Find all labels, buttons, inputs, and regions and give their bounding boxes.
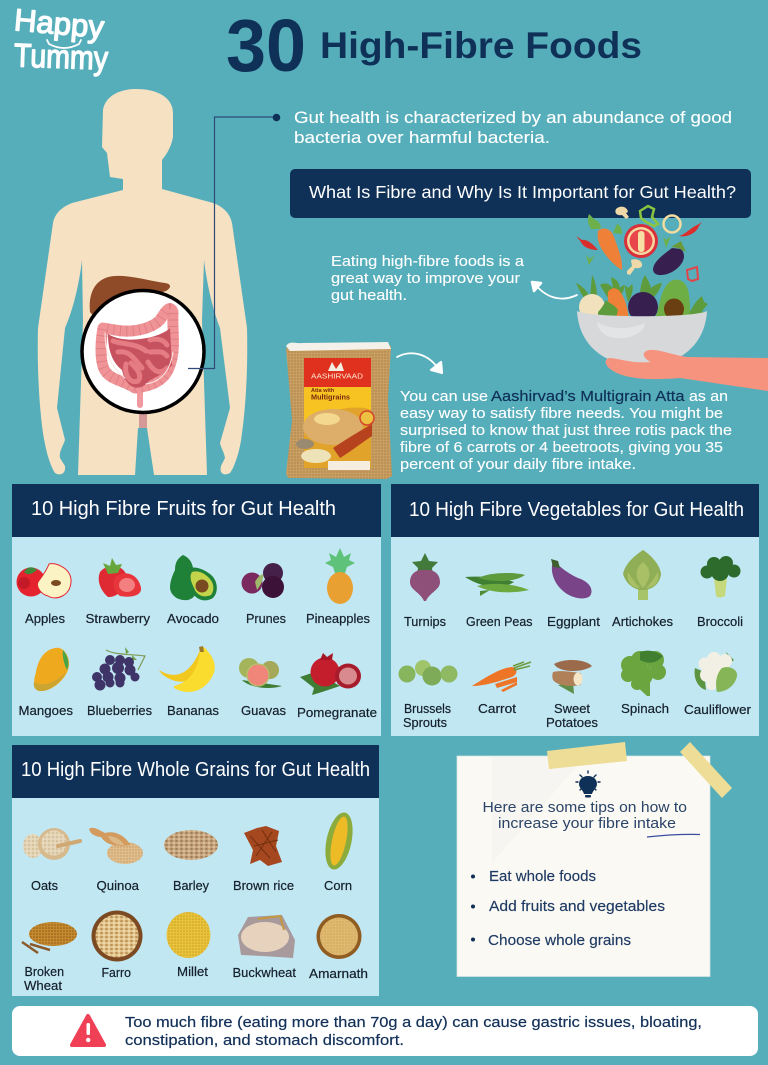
body outline bbox=[38, 89, 247, 475]
title: 30 bbox=[226, 4, 306, 87]
rice bowl bbox=[301, 449, 331, 463]
text: Aashirvad atta paragraph: Aashirvad’s Multigrain Atta bbox=[491, 388, 685, 405]
food: oats bbox=[23, 828, 80, 893]
panel heading bbox=[391, 484, 759, 537]
food: artichokes: Artichokes bbox=[612, 615, 673, 629]
tips note bbox=[457, 742, 732, 976]
text: eating high-fibre foods: gut health. bbox=[331, 287, 407, 304]
food: buckwheat: Buckwheat bbox=[232, 966, 297, 980]
bowl carrot bbox=[608, 288, 629, 318]
round seal bbox=[360, 411, 374, 425]
panel heading bbox=[12, 745, 379, 798]
illustration: bowl of vegetables bbox=[576, 206, 768, 391]
food: broken wheat bbox=[22, 922, 77, 993]
bag body bbox=[286, 346, 392, 479]
text: Aashirvad atta paragraph: surprised to know that just three rotis pack the bbox=[400, 422, 732, 439]
food: amarnath: Amarnath bbox=[309, 967, 368, 981]
food: millet: Millet bbox=[177, 965, 209, 979]
panel body bbox=[12, 537, 381, 736]
text: Aashirvad atta paragraph: fibre of 6 carrots or 4 beetroots, giving you 35 bbox=[400, 439, 723, 456]
food: green peas: Green Peas bbox=[466, 615, 532, 629]
food: bananas: Bananas bbox=[167, 704, 219, 718]
food: broccoli bbox=[697, 556, 743, 629]
food: pineapple bbox=[306, 548, 370, 626]
logo: Happy Tummy: Tummy bbox=[13, 36, 109, 77]
food: broken wheat: Broken bbox=[24, 965, 64, 979]
text: Aashirvad atta paragraph: easy way to satisfy fibre needs. You might be bbox=[400, 405, 723, 422]
liver bbox=[90, 276, 170, 330]
tip list: Choose whole grains bbox=[488, 933, 631, 949]
grain band bbox=[333, 424, 372, 458]
intro text: bacteria over harmful bacteria. bbox=[294, 129, 550, 147]
bag yellow panel bbox=[304, 387, 371, 468]
panel heading: 10 High Fibre Fruits for Gut Health bbox=[31, 498, 336, 520]
intestines bbox=[101, 309, 173, 405]
food: strawberry: Strawberry bbox=[86, 612, 151, 626]
flying carrot bbox=[598, 229, 622, 270]
subheading banner: What Is Fibre and Why Is It Important for Gut Health? bbox=[309, 182, 736, 202]
food: brussels sprouts: Sprouts bbox=[403, 716, 447, 730]
logo: Happy Tummy bbox=[13, 2, 109, 77]
food: spinach: Spinach bbox=[621, 702, 669, 716]
colon bbox=[101, 309, 173, 388]
warning text: constipation, and stomach discomfort. bbox=[125, 1032, 404, 1049]
food: quinoa: Quinoa bbox=[96, 879, 139, 893]
panel body bbox=[12, 798, 379, 996]
avocado bbox=[655, 280, 690, 318]
intro text bbox=[294, 109, 732, 147]
food: quinoa bbox=[89, 828, 143, 893]
mushrooms bbox=[615, 207, 642, 275]
food: sweet potatoes bbox=[546, 660, 598, 730]
food: turnips bbox=[404, 553, 446, 629]
food: pomegranate: Pomegranate bbox=[297, 706, 377, 720]
product name bbox=[311, 388, 350, 402]
tape left bbox=[547, 742, 627, 769]
warning text bbox=[125, 1014, 702, 1049]
food: carrot: Carrot bbox=[478, 702, 517, 716]
tip list: Eat whole foods bbox=[489, 869, 596, 885]
food: buckwheat bbox=[232, 915, 297, 980]
warning callout bbox=[12, 1006, 758, 1056]
chillies bbox=[576, 222, 702, 250]
product name: Multigrains bbox=[311, 394, 350, 402]
food: spinach bbox=[621, 651, 669, 716]
food: guavas bbox=[239, 658, 286, 718]
text: eating high-fibre foods: great way to improve your bbox=[331, 270, 520, 287]
text: Aashirvad atta paragraph: You can use bbox=[400, 388, 488, 405]
food: green peas bbox=[465, 573, 532, 629]
intestine loops bbox=[113, 339, 167, 382]
colon segments bbox=[101, 309, 173, 388]
food: broccoli: Broccoli bbox=[697, 615, 743, 629]
eggplant bbox=[653, 248, 684, 275]
bowl bbox=[577, 311, 707, 366]
panel heading: 10 High Fibre Vegetables for Gut Health bbox=[409, 499, 744, 521]
food: brussels sprouts: Brussels bbox=[404, 702, 451, 716]
bowl lettuce bbox=[598, 300, 618, 318]
food: prunes: Prunes bbox=[246, 612, 286, 626]
food: broken wheat: Wheat bbox=[24, 979, 63, 993]
warning text: Too much fibre (eating more than 70g a day) can cause gastric issues, bloating, bbox=[125, 1014, 702, 1031]
food: guavas: Guavas bbox=[241, 704, 286, 718]
food: eggplant bbox=[547, 559, 601, 629]
tip list: Add fruits and vegetables bbox=[489, 899, 665, 915]
food: cauliflower bbox=[684, 652, 751, 717]
food: eggplant: Eggplant bbox=[547, 615, 601, 629]
small intestine bbox=[108, 328, 172, 388]
product: Aashirvaad multigrain atta bag bbox=[286, 342, 392, 479]
panel heading bbox=[12, 484, 381, 537]
white line bbox=[105, 333, 173, 384]
food: millet bbox=[166, 912, 210, 979]
tip list bbox=[471, 869, 665, 949]
food: apples: Apples bbox=[25, 612, 65, 626]
hand bbox=[606, 350, 768, 391]
panel: fruits bbox=[12, 484, 381, 736]
product name: Atta with bbox=[311, 388, 335, 394]
food: apples bbox=[16, 564, 71, 626]
tape right bbox=[680, 742, 732, 798]
bag red label bbox=[304, 358, 371, 387]
panel body bbox=[391, 537, 759, 736]
panel: whole grains bbox=[12, 745, 379, 996]
food: pineapple: Pineapples bbox=[306, 612, 370, 626]
red pepper ring bbox=[687, 267, 698, 281]
food: bananas bbox=[159, 646, 219, 718]
tomato bbox=[624, 224, 658, 258]
arrow to eating text bbox=[532, 282, 577, 299]
food: amarnath bbox=[309, 914, 368, 981]
food: farro bbox=[92, 910, 142, 980]
rectum bbox=[137, 388, 143, 405]
food: farro: Farro bbox=[102, 966, 131, 980]
text: Aashirvad atta paragraph bbox=[400, 388, 732, 473]
food: barley bbox=[164, 830, 218, 893]
food: brussels sprouts bbox=[398, 660, 458, 730]
food: strawberry bbox=[86, 558, 151, 626]
brand name: AASHIRVAAD bbox=[311, 374, 363, 380]
food: oats: Oats bbox=[31, 879, 58, 893]
food: corn bbox=[321, 810, 357, 893]
connector line bbox=[188, 117, 276, 368]
panel heading: 10 High Fibre Whole Grains for Gut Health bbox=[21, 759, 370, 781]
food: avocado: Avocado bbox=[167, 612, 219, 626]
food: prunes bbox=[242, 563, 286, 626]
food: corn: Corn bbox=[324, 879, 352, 893]
food: sweet potatoes: Potatoes bbox=[546, 716, 598, 730]
food: turnips: Turnips bbox=[404, 615, 446, 629]
icon: warning triangle bbox=[72, 1016, 104, 1045]
text: Aashirvad atta paragraph: percent of your daily fibre intake. bbox=[400, 456, 636, 473]
body silhouette with gut bbox=[38, 89, 280, 475]
food: mangoes: Mangoes bbox=[18, 704, 73, 718]
bowl eggplant bbox=[628, 292, 658, 322]
roti bbox=[303, 409, 363, 445]
food: cauliflower: Cauliflower bbox=[684, 703, 751, 717]
food: brown rice bbox=[233, 826, 294, 893]
note paper bbox=[457, 756, 710, 976]
leaves bbox=[586, 214, 671, 265]
food: carrot bbox=[472, 662, 531, 716]
text: Aashirvad atta paragraph: as an bbox=[689, 388, 728, 405]
arrow to atta text bbox=[397, 353, 442, 373]
panel: vegetables bbox=[391, 484, 759, 736]
right greens bbox=[688, 296, 708, 318]
food: barley: Barley bbox=[173, 879, 210, 893]
bag lower band bbox=[304, 407, 371, 468]
food: sweet potatoes: Sweet bbox=[554, 702, 591, 716]
intro text: Gut health is characterized by an abundance of good bbox=[294, 109, 732, 127]
food: avocado bbox=[167, 555, 219, 626]
text: eating high-fibre foods bbox=[331, 253, 525, 304]
icon: light bulb bbox=[576, 771, 600, 798]
food: artichokes bbox=[612, 550, 673, 629]
note heading: increase your fibre intake bbox=[498, 816, 676, 832]
subheading banner bbox=[290, 169, 751, 218]
bag top seal bbox=[286, 342, 391, 351]
green pepper ring bbox=[640, 206, 658, 226]
note heading bbox=[482, 800, 687, 832]
title bbox=[226, 4, 642, 87]
pelvis detail bbox=[139, 412, 147, 428]
nutrition boxes bbox=[328, 461, 370, 470]
bowl greens bbox=[576, 275, 662, 304]
title: High-Fibre Foods bbox=[320, 25, 642, 66]
magnifier circle bbox=[82, 290, 204, 412]
logo: Happy Tummy: Happy bbox=[13, 2, 106, 45]
onion ring bbox=[664, 216, 680, 232]
brand logo leaves bbox=[328, 362, 344, 371]
connector dot bbox=[273, 114, 280, 121]
food: pomegranate bbox=[297, 653, 377, 720]
food: brown rice: Brown rice bbox=[233, 879, 294, 893]
note heading: Here are some tips on how to bbox=[482, 800, 687, 816]
bowl onion bbox=[579, 294, 605, 320]
paper fold bbox=[492, 757, 585, 863]
food: blueberries: Blueberries bbox=[87, 704, 152, 718]
food: blueberries bbox=[87, 647, 152, 718]
text: eating high-fibre foods: Eating high-fibre foods is a bbox=[331, 253, 525, 270]
underline stroke bbox=[647, 834, 700, 837]
food: mangoes bbox=[18, 648, 73, 718]
